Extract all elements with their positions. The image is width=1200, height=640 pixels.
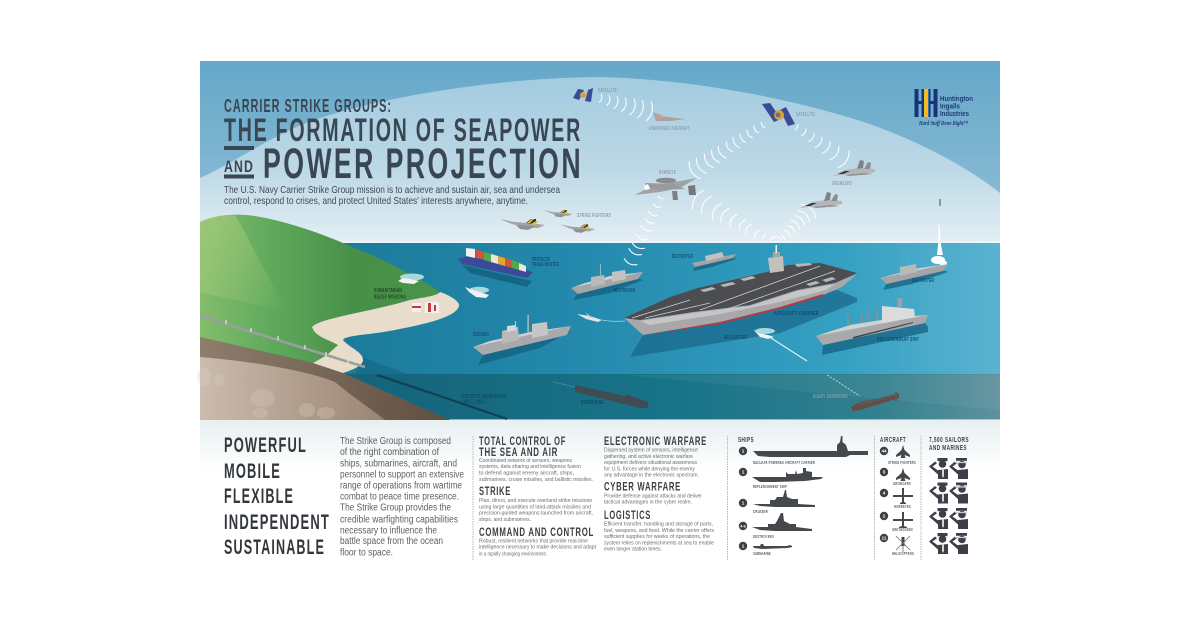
Hawkeye aircraft (635, 170, 697, 200)
ships inventory: REPLENISHMENT SHIP (753, 484, 787, 489)
replenishment ship (816, 298, 928, 355)
capabilities column 2: LOGISTICS (604, 510, 651, 522)
growler aircraft (800, 160, 875, 208)
capabilities column 2: gathering, and active electronic warfare (604, 454, 693, 460)
bottom section background (200, 420, 1000, 470)
jet over water (577, 312, 625, 322)
logo: Huntington Ingalls Industries: Huntington (940, 94, 973, 103)
satellite 2: SATELLITE (796, 112, 815, 118)
ships inventory: DESTROYERS (753, 534, 774, 539)
capabilities column 1: submarines, cruise missiles, and ballistic missiles. (479, 477, 593, 483)
capabilities column 1: ships, and submarines. (479, 517, 531, 523)
humanitarian relief: HUMANITARIAN (374, 288, 402, 294)
title block (224, 95, 583, 188)
pipeline on land (200, 316, 365, 367)
destroyer upper (672, 252, 736, 271)
capabilities column 2: for U.S. forces while denying the enemy (604, 466, 695, 472)
capabilities column 2: CYBER WARFARE (604, 482, 681, 494)
satellite 1: SATELLITE (598, 88, 617, 94)
enemy submarine (813, 375, 899, 411)
dividers (473, 436, 921, 561)
title block: THE FORMATION OF SEAPOWER (224, 112, 582, 148)
container ship: TRADE ROUTES (532, 262, 559, 268)
capabilities column 1: in a rapidly changing environment. (479, 551, 547, 557)
scene panel background (200, 61, 1000, 420)
signal arcs (598, 89, 852, 267)
aircraft inventory: HELICOPTERS (892, 551, 914, 556)
ships inventory: CRUISER (753, 509, 768, 514)
ships inventory (738, 435, 868, 556)
growler aircraft: GROWLERS (832, 181, 852, 187)
aircraft inventory: 44 (881, 449, 887, 454)
aircraft inventory: STRIKE FIGHTERS (888, 460, 916, 465)
capabilities column 1: Coordinated network of sensors, weapons (479, 458, 572, 464)
unmanned aircraft: UNMANNED AIRCRAFT (649, 126, 690, 132)
submarine (553, 382, 648, 408)
attribute words (224, 434, 330, 559)
ships inventory: 1 (742, 544, 745, 549)
capabilities column 1: using large quantities of land-attack missiles and (479, 504, 591, 510)
capabilities column 2: Provide defense against attacks and deliver (604, 493, 702, 499)
capabilities column 2: Efficient transfer, handling and storage of parts, (604, 522, 713, 528)
capabilities column 2: Dispersed system of sensors, intelligence (604, 448, 698, 454)
capabilities column 2: system relies on replenishments at sea to enable (604, 540, 714, 546)
logo: Huntington Ingalls Industries (914, 89, 973, 127)
destroyer centre (571, 264, 643, 300)
strike group paragraph: ships, submarines, aircraft, and (340, 458, 457, 470)
strike fighters (500, 210, 611, 233)
attribute words: POWERFUL (224, 434, 307, 457)
enemy submarine: ENEMY SUBMARINE (813, 394, 848, 400)
aircraft inventory: AIRCRAFT (880, 435, 906, 444)
container ship: PROTECTS (532, 257, 550, 263)
aircraft inventory (880, 435, 916, 556)
intro text: control, respond to crises, and protect United States' interests anywhere, anytime. (224, 196, 528, 207)
title block: POWER PROJECTION (263, 140, 583, 188)
humanitarian relief (374, 288, 439, 313)
capabilities column 1 (479, 436, 596, 557)
sailors and marines: AND MARINES (929, 443, 967, 452)
ships inventory: SHIPS (738, 435, 754, 444)
cable label: PROTECTS UNDERWATER (461, 394, 506, 400)
attribute words: SUSTAINABLE (224, 536, 325, 559)
ships inventory: 1 (742, 470, 745, 475)
strike group paragraph: personnel to support an extensive (340, 470, 464, 480)
capabilities column 1: THE SEA AND AIR (479, 447, 558, 459)
cruiser: CRUISER (473, 332, 489, 338)
capabilities column 2: any advantage in the electronic spectrum. (604, 473, 699, 479)
aircraft carrier: AIRCRAFT CARRIER (774, 311, 819, 317)
title block: AND (224, 157, 254, 176)
destroyer right (880, 253, 948, 290)
logo: Huntington Ingalls Industries: Ingalls (940, 102, 960, 110)
aircraft inventory: 11 (882, 536, 887, 541)
replenishment ship: REPLENISHMENT SHIP (877, 337, 919, 343)
capabilities column 2: equipment delivers situational awareness (604, 460, 697, 466)
attribute words: MOBILE (224, 460, 281, 483)
strike group paragraph: The Strike Group provides the (340, 502, 451, 514)
submarine: SUBMARINE (581, 400, 604, 406)
title block: CARRIER STRIKE GROUPS: (224, 95, 392, 116)
capabilities column 1: intelligence necessary to make decisions and adapt (479, 545, 596, 551)
strike group paragraph: credible warfighting capabilities (340, 514, 458, 526)
unmanned aircraft (649, 112, 690, 132)
satellite 2 (762, 103, 815, 126)
aircraft carrier (624, 245, 857, 357)
capabilities column 1: to defend against enemy aircraft, ships, (479, 470, 574, 476)
capabilities column 1: TOTAL CONTROL OF (479, 436, 566, 448)
sailors and marines: 7,500 SAILORS (929, 435, 969, 444)
logo: Huntington Ingalls Industries: Industries (940, 109, 969, 118)
helicopter with torpedo line (724, 328, 807, 361)
strike group paragraph: floor to space. (340, 548, 393, 558)
strike group paragraph (340, 436, 464, 558)
capabilities column 2: tactical advantages in the cyber realm. (604, 500, 692, 506)
intro text: The U.S. Navy Carrier Strike Group mission is to achieve and sustain air, sea and undersea (224, 185, 560, 196)
capabilities column 1: precision-guided weapons launched from aircraft, (479, 510, 593, 516)
aircraft inventory: HAWKEYES (894, 504, 911, 509)
attribute words: FLEXIBLE (224, 485, 294, 508)
land: hill, beach and seabed (197, 215, 459, 420)
ships inventory: 4-6 (740, 524, 747, 529)
capabilities column 2: even longer station times. (604, 547, 662, 553)
helicopter over water (465, 287, 489, 298)
aircraft inventory: 2 (883, 514, 886, 519)
ships inventory: SUBMARINE (753, 551, 771, 556)
aircraft inventory: 4 (883, 491, 886, 496)
ships inventory: NUCLEAR POWERED AIRCRAFT CARRIER (753, 460, 815, 465)
strike group paragraph: combat to peace time presence. (340, 492, 459, 502)
ships inventory: 1 (742, 449, 745, 454)
cable label (461, 394, 506, 406)
strike group paragraph: necessary to influence the (340, 526, 437, 536)
capabilities column 2: fuel, weapons, and food. While the carrier offers (604, 528, 714, 534)
strike group paragraph: range of operations from wartime (340, 480, 462, 492)
humanitarian relief: RELIEF MISSIONS (374, 294, 406, 300)
strike group paragraph: battle space from the ocean (340, 536, 443, 547)
capabilities column 1: Robust, resilient networks that provide real-time (479, 538, 588, 544)
Hawkeye aircraft: HAWKEYE (659, 170, 676, 176)
cable label: CABLE LINES (461, 400, 485, 406)
capabilities column 1: Plan, direct, and execute overland strike missions (479, 498, 592, 504)
destroyer upper: DESTROYER (672, 254, 693, 260)
aircraft inventory: 5 (883, 470, 886, 475)
strike group paragraph: of the right combination of (340, 447, 439, 458)
intro text (224, 185, 560, 207)
helicopter near beach (398, 274, 424, 284)
underwater cable (377, 375, 507, 419)
destroyer centre: DESTROYER (614, 288, 635, 294)
ships inventory: 1 (742, 501, 745, 506)
aircraft inventory: GREYHOUNDS (892, 527, 913, 532)
container ship (458, 248, 559, 287)
sailors and marines (929, 435, 969, 554)
cruiser (473, 315, 571, 365)
capabilities column 1: COMMAND AND CONTROL (479, 527, 594, 539)
aircraft inventory: GROWLERS (893, 481, 911, 486)
helicopter with torpedo line: HELICOPTER (724, 335, 747, 341)
logo: Huntington Ingalls Industries: Hard Stuff Done Right™ (918, 121, 968, 127)
capabilities column 2: sufficient supplies for weeks of operations, the (604, 534, 710, 540)
attribute words: INDEPENDENT (224, 511, 330, 534)
capabilities column 1: systems, data sharing and intelligence fusion (479, 464, 581, 470)
destroyer right: DESTROYER (912, 278, 934, 284)
capabilities column 2: ELECTRONIC WARFARE (604, 436, 707, 448)
missile launch (931, 199, 947, 266)
capabilities column 1: STRIKE (479, 486, 511, 498)
capabilities column 2 (604, 436, 714, 553)
strike fighters: STRIKE FIGHTERS (577, 213, 611, 219)
satellite 1 (573, 88, 617, 102)
strike group paragraph: The Strike Group is composed (340, 436, 451, 447)
